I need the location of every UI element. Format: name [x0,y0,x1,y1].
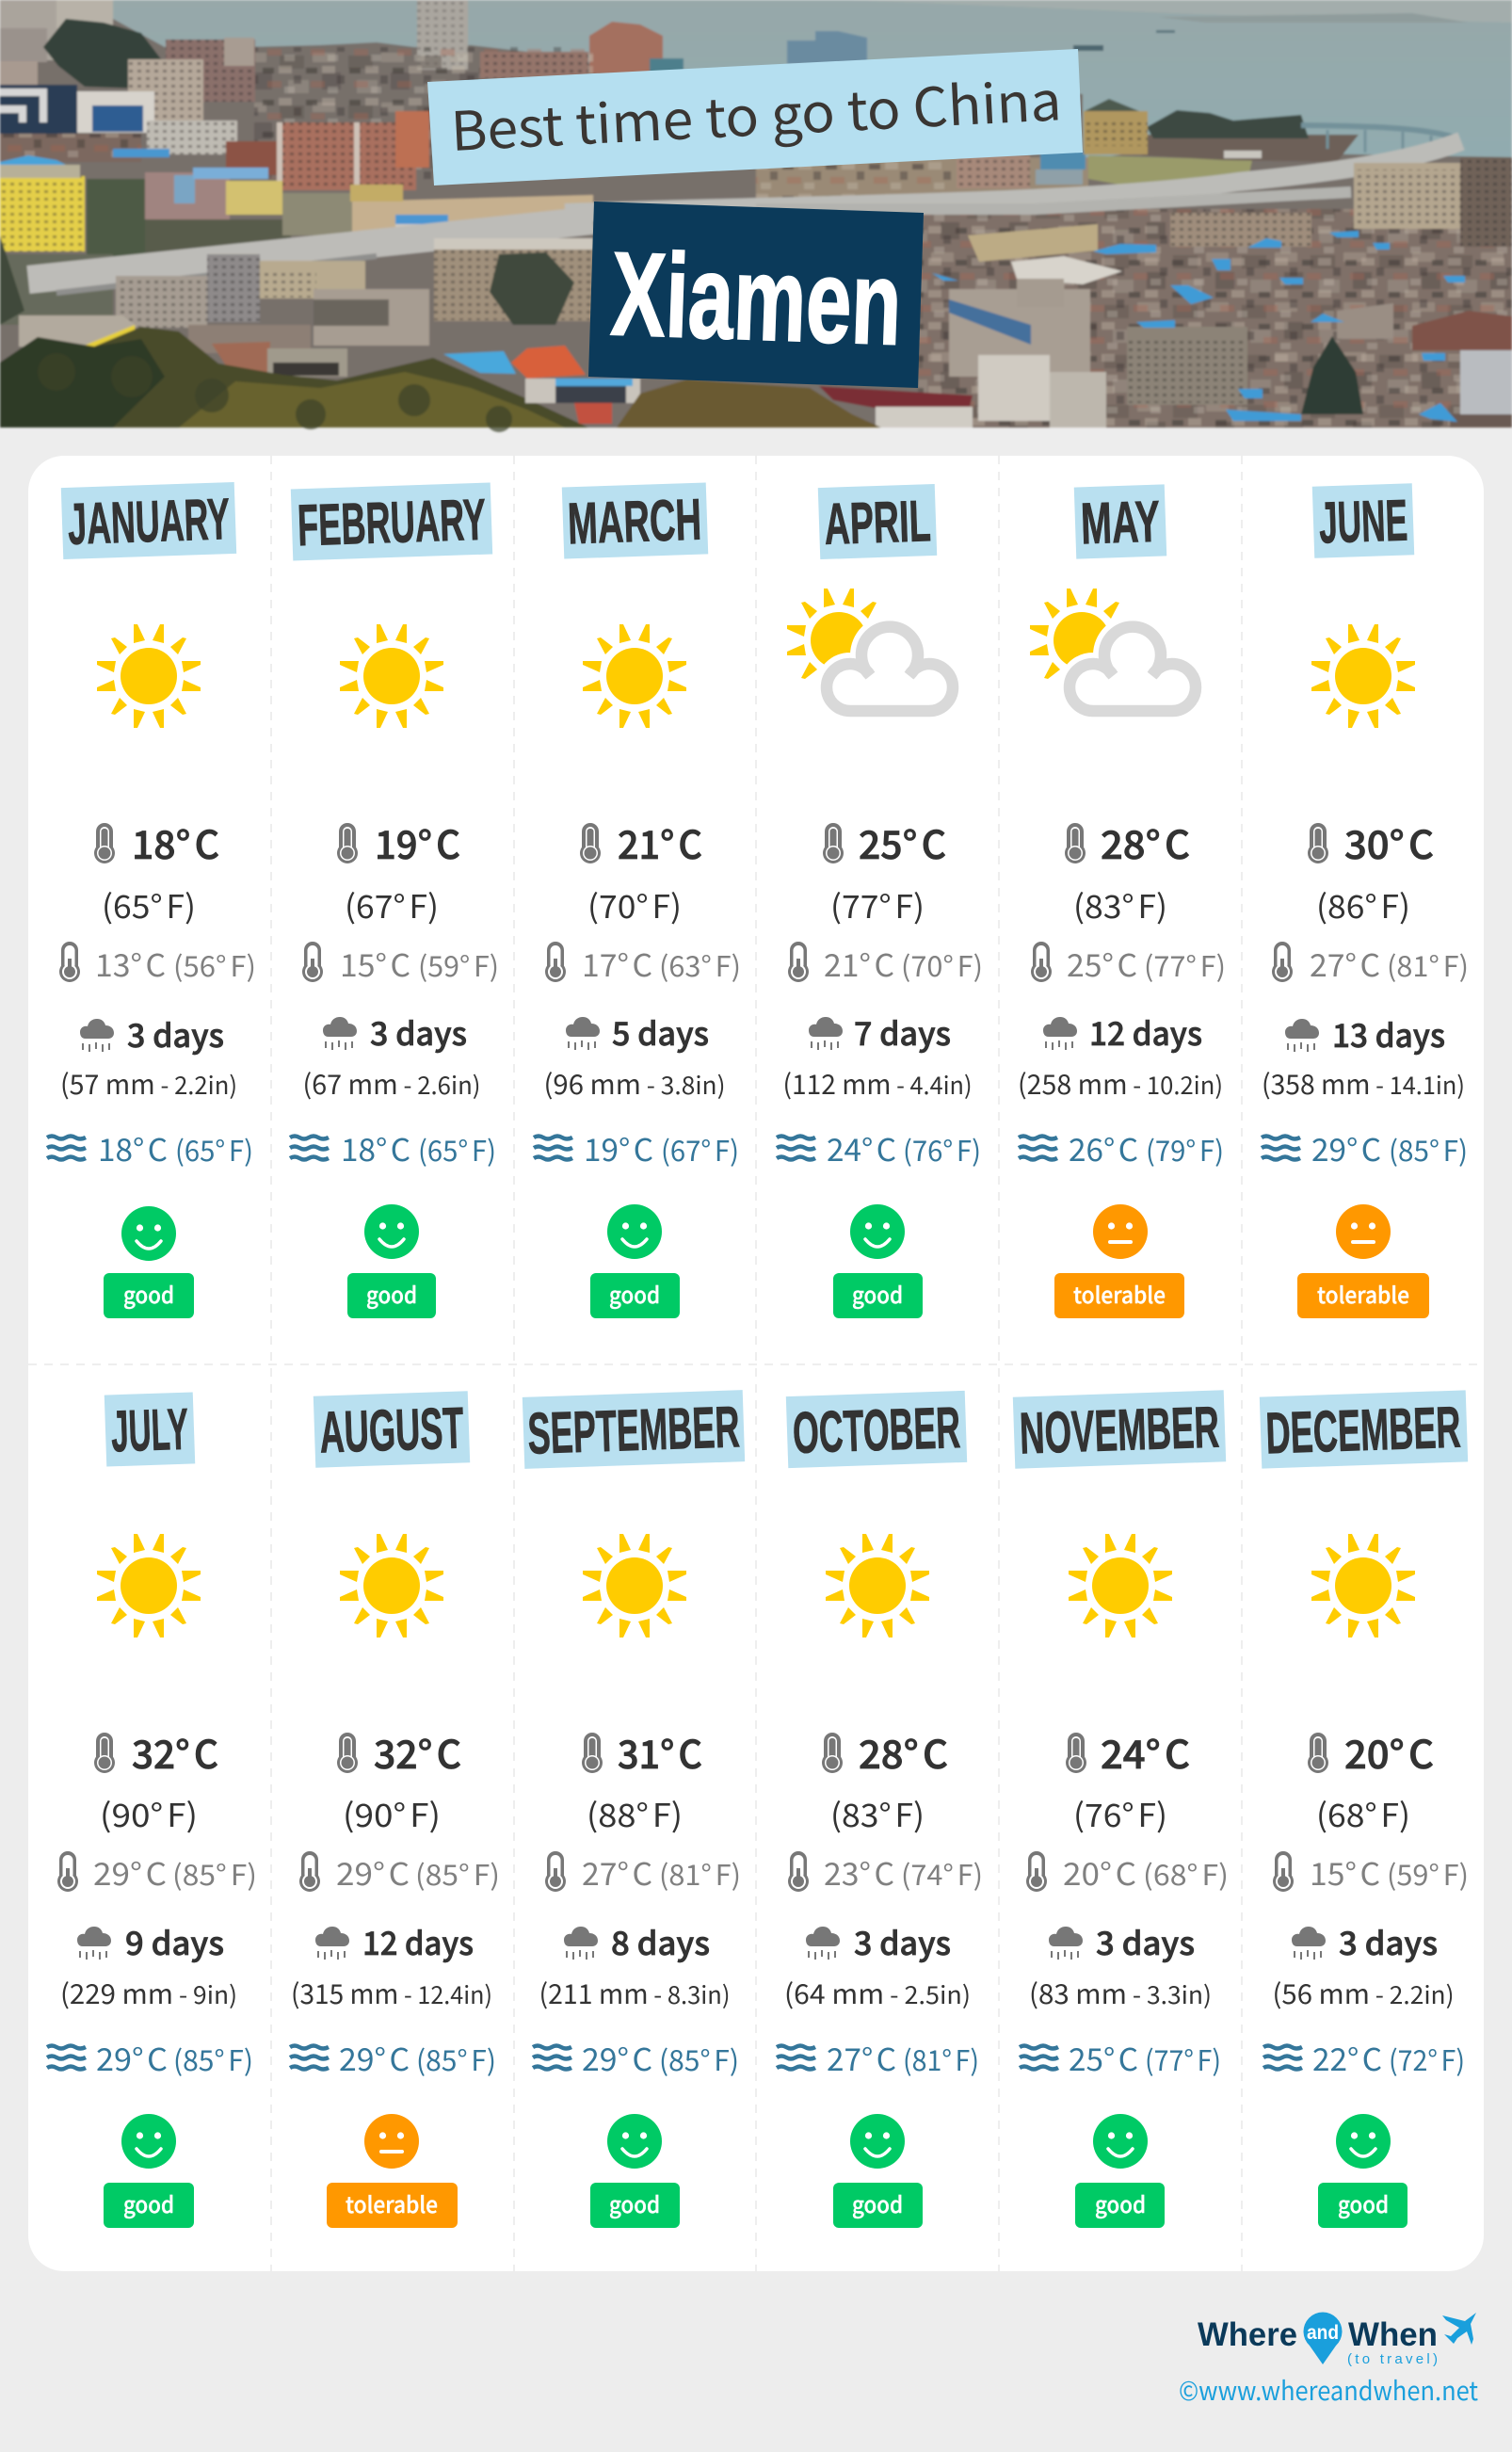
rainy days: 9 days [125,1918,224,1964]
rainfall: (67 mm - 2.6in) [303,1063,480,1103]
low temperature: (59° F) [418,944,499,985]
rainy days [323,1008,467,1055]
month label: February [291,483,492,560]
rainfall: (229 mm - 9in) [60,1973,237,2012]
high temperature in Fahrenheit: (90° F) [100,1790,198,1836]
sea temperature: (77° F) [1145,2038,1221,2079]
sea temperature [1263,2035,1465,2080]
sea temperature [534,1125,739,1170]
panel: November [1013,1390,1229,2228]
rainfall: (315 mm - 12.4in) [291,1973,492,2012]
low temperature [57,1849,257,1895]
icon: sun [583,1534,686,1637]
rating: good [590,1204,680,1318]
high temperature [580,814,702,870]
month label: September [523,1390,745,1469]
month label: October [786,1391,967,1468]
rainfall: (358 mm - 14.1in) [1262,1063,1465,1103]
month label: August: AUGUST [318,1395,465,1466]
rating: tolerable: tolerable [1317,1277,1409,1310]
low temperature: (81° F) [1387,944,1469,985]
low temperature: 20° C [1063,1849,1136,1895]
rainy days: 3 days [1096,1918,1195,1964]
high temperature: 28° C [859,1723,948,1780]
icon: sun [340,624,443,728]
high temperature: 19° C [375,814,460,870]
rating: good [833,2114,923,2228]
month label: July [105,1392,195,1467]
high temperature [582,1723,702,1780]
sea temperature: 29° C [1311,1125,1381,1170]
sea temperature [290,2035,496,2080]
month label: October: OCTOBER [792,1395,961,1466]
rainfall: (64 mm - 2.5in) [784,1973,971,2012]
sea temperature: (81° F) [903,2038,979,2079]
high temperature in Fahrenheit: (77° F) [830,881,925,928]
month label: September: SEPTEMBER [526,1395,741,1467]
month label: November [1013,1390,1226,1469]
high temperature: 32° C [374,1723,461,1780]
rating: good: good [609,2186,660,2219]
panel: March [534,482,741,1318]
logo: Where and When (to travel): and [1307,2322,1339,2344]
month label: November: NOVEMBER [1019,1395,1220,1466]
logo: Where and When (to travel): (to travel) [1347,2351,1438,2367]
high temperature in Fahrenheit: (83° F) [830,1790,925,1836]
icon: sun [583,624,686,728]
low temperature [1272,941,1469,986]
low temperature: (56° F) [173,944,256,985]
title banner: Best time to go to China: Best time to go to China [449,58,1063,167]
month label: March [562,482,708,558]
low temperature [1026,1849,1229,1895]
high temperature: 24° C [1101,1723,1190,1780]
sea temperature: (65° F) [175,1128,253,1170]
high temperature in Fahrenheit: (90° F) [343,1790,441,1836]
low temperature [545,1849,741,1895]
rainfall: (57 mm - 2.2in) [60,1063,237,1103]
month label: May [1074,484,1166,559]
rainy days [1049,1918,1195,1964]
icon: airplane [1442,2313,1476,2345]
low temperature: 23° C [824,1849,894,1895]
month label: March: MARCH [567,488,702,557]
sea temperature [533,2035,739,2080]
icon: sun [97,624,201,728]
sea temperature [1262,1125,1468,1170]
low temperature: (74° F) [901,1852,983,1894]
sea temperature [1019,1125,1224,1170]
sea temperature: (85° F) [416,2038,496,2079]
panel: September [523,1390,745,2228]
sea temperature: 27° C [827,2035,896,2080]
rainy days: 3 days [370,1008,467,1055]
low temperature: (85° F) [415,1852,500,1894]
month label: May: MAY [1080,490,1161,557]
high temperature in Fahrenheit: (65° F) [102,881,196,928]
high temperature [1308,1723,1434,1780]
low temperature [302,941,499,986]
rainy days: 3 days [854,1918,951,1964]
rating: good [1075,2114,1165,2228]
low temperature [1031,941,1226,986]
low temperature: 27° C [582,1849,652,1895]
low temperature: (63° F) [659,944,741,985]
sea temperature [1020,2035,1221,2080]
high temperature in Fahrenheit: (88° F) [587,1790,683,1836]
sea temperature: 18° C [98,1125,168,1170]
icon: sun [97,1534,201,1637]
icon: sun [1311,1534,1415,1637]
low temperature: 13° C [95,941,166,986]
panel: May [1018,484,1226,1318]
city banner: Xiamen [588,202,924,388]
rainfall: (56 mm - 2.2in) [1273,1973,1454,2012]
high temperature in Fahrenheit: (70° F) [587,881,682,928]
sea temperature [47,1125,253,1170]
low temperature: (59° F) [1387,1852,1469,1894]
rating: good [104,1206,194,1318]
rating: good [1318,2114,1407,2228]
sea temperature: (76° F) [903,1128,981,1170]
rating: good: good [366,1277,417,1310]
logo: Where and When (to travel): When [1348,2316,1438,2353]
month label: April: APRIL [823,489,932,557]
low temperature: 15° C [340,941,410,986]
panel: December [1260,1390,1469,2228]
low temperature: 29° C [93,1849,167,1895]
low temperature: 29° C [336,1849,410,1895]
rainy days [806,1918,951,1964]
rating: good: good [609,1277,660,1310]
rainy days: 12 days [1089,1008,1202,1055]
rainy days: 12 days [362,1918,474,1964]
sea temperature: (85° F) [173,2038,253,2079]
rainy days [809,1008,951,1055]
month label: June: JUNE [1318,488,1408,557]
logo: Where and When (to travel) [1198,2313,1476,2367]
high temperature [94,814,219,870]
low temperature: 15° C [1310,1849,1380,1895]
sea temperature: (72° F) [1389,2038,1465,2079]
low temperature: 21° C [824,941,894,986]
low temperature [788,1849,983,1895]
sea temperature [777,1125,981,1170]
rainy days [80,1010,224,1057]
rainfall: (258 mm - 10.2in) [1018,1063,1223,1103]
rating: good: good [852,2186,903,2219]
low temperature: (85° F) [172,1852,257,1894]
sea temperature: (65° F) [418,1128,496,1170]
icon: sun and cloud [787,589,953,711]
high temperature: 31° C [618,1723,702,1780]
low temperature: (70° F) [901,944,983,985]
low temperature: 25° C [1067,941,1137,986]
low temperature [1273,1849,1469,1895]
high temperature in Fahrenheit: (86° F) [1316,881,1410,928]
month label: April [818,484,937,559]
sea temperature [290,1125,496,1170]
sea temperature [777,2035,979,2080]
rainy days: 8 days [611,1918,710,1964]
high temperature: 21° C [618,814,702,870]
high temperature: 28° C [1101,814,1190,870]
rating: good: good [1095,2186,1146,2219]
city banner: Xiamen: Xiamen [609,227,904,370]
low temperature [299,1849,500,1895]
panel: monthly climate table [28,456,1484,2271]
panel: October [777,1391,983,2228]
rainy days: 3 days [1339,1918,1438,1964]
sea temperature: 29° C [339,2035,410,2080]
sea temperature: (85° F) [659,2038,739,2079]
low temperature: (77° F) [1144,944,1226,985]
rating: good: good [1338,2186,1389,2219]
rainfall: (96 mm - 3.8in) [544,1063,725,1103]
rating: good [347,1204,436,1318]
sea temperature: 29° C [96,2035,168,2080]
rainy days: 7 days [854,1008,951,1055]
rating: good [833,1204,923,1318]
rating: good: good [123,1277,174,1310]
photo: Xiamen city and bay [0,0,1512,432]
rating: good [104,2114,194,2228]
sea temperature: 25° C [1069,2035,1138,2080]
panel: August [290,1391,500,2228]
sea temperature: (79° F) [1146,1128,1224,1170]
rating: tolerable [327,2114,458,2228]
rainy days: 5 days [612,1008,709,1055]
rainy days [315,1918,474,1964]
month label: July: JULY [110,1397,189,1464]
low temperature: 27° C [1310,941,1380,986]
month label: June [1312,483,1414,558]
low temperature: 17° C [582,941,652,986]
sea temperature: 26° C [1069,1125,1138,1170]
rating: good: good [852,1277,903,1310]
high temperature in Fahrenheit: (68° F) [1316,1790,1410,1836]
panel: June [1262,483,1469,1318]
high temperature: 20° C [1344,1723,1434,1780]
rating: tolerable [1054,1204,1184,1318]
rating: tolerable [1297,1204,1429,1318]
rainfall: (112 mm - 4.4in) [783,1063,972,1103]
month label: February: FEBRUARY [297,488,487,558]
sea temperature: 24° C [827,1125,896,1170]
high temperature [337,814,460,870]
high temperature: 32° C [132,1723,218,1780]
icon: map pin [1303,2313,1342,2364]
rating: tolerable: tolerable [346,2186,438,2219]
rating: good [590,2114,680,2228]
low temperature [545,941,741,986]
panel: April [777,484,983,1318]
high temperature in Fahrenheit: (67° F) [345,881,439,928]
icon: sun [340,1534,443,1637]
sea temperature: (85° F) [1389,1128,1468,1170]
high temperature: 30° C [1344,814,1434,870]
low temperature: (68° F) [1143,1852,1229,1894]
sea temperature: 29° C [582,2035,652,2080]
website credit: ©www.whereandwhen.net [1179,2371,1478,2409]
low temperature: (81° F) [659,1852,741,1894]
rainy days [1285,1010,1445,1057]
month label: January: JANUARY [67,487,231,557]
low temperature [788,941,983,986]
low temperature [59,941,256,986]
rainy days [1292,1918,1438,1964]
sea temperature [47,2035,253,2080]
sea temperature: (67° F) [661,1128,739,1170]
logo: Where and When (to travel): Where [1198,2316,1297,2353]
rainy days: 13 days [1332,1010,1445,1057]
month label: August [314,1391,470,1468]
rainy days: 3 days [127,1010,224,1057]
panel: July [47,1392,257,2228]
month label: January [61,482,236,559]
icon: sun [1069,1534,1172,1637]
rainy days [566,1008,709,1055]
icon: sun [1311,624,1415,728]
high temperature [822,1723,948,1780]
rating: tolerable: tolerable [1073,1277,1166,1310]
high temperature [1308,814,1434,870]
rating: good: good [123,2186,174,2219]
high temperature: 18° C [132,814,219,870]
high temperature [94,1723,218,1780]
panel: January [47,482,256,1318]
sea temperature: 19° C [584,1125,653,1170]
rainy days [77,1918,224,1964]
high temperature in Fahrenheit: (83° F) [1073,881,1167,928]
icon: sun and cloud [1030,589,1196,711]
rainy days [564,1918,710,1964]
rainfall: (83 mm - 3.3in) [1029,1973,1212,2012]
high temperature in Fahrenheit: (76° F) [1073,1790,1167,1836]
sea temperature: 22° C [1312,2035,1382,2080]
high temperature: 25° C [859,814,946,870]
sea temperature: 18° C [341,1125,410,1170]
icon: sun [826,1534,929,1637]
rainfall: (211 mm - 8.3in) [539,1973,731,2012]
panel: February [290,483,499,1318]
